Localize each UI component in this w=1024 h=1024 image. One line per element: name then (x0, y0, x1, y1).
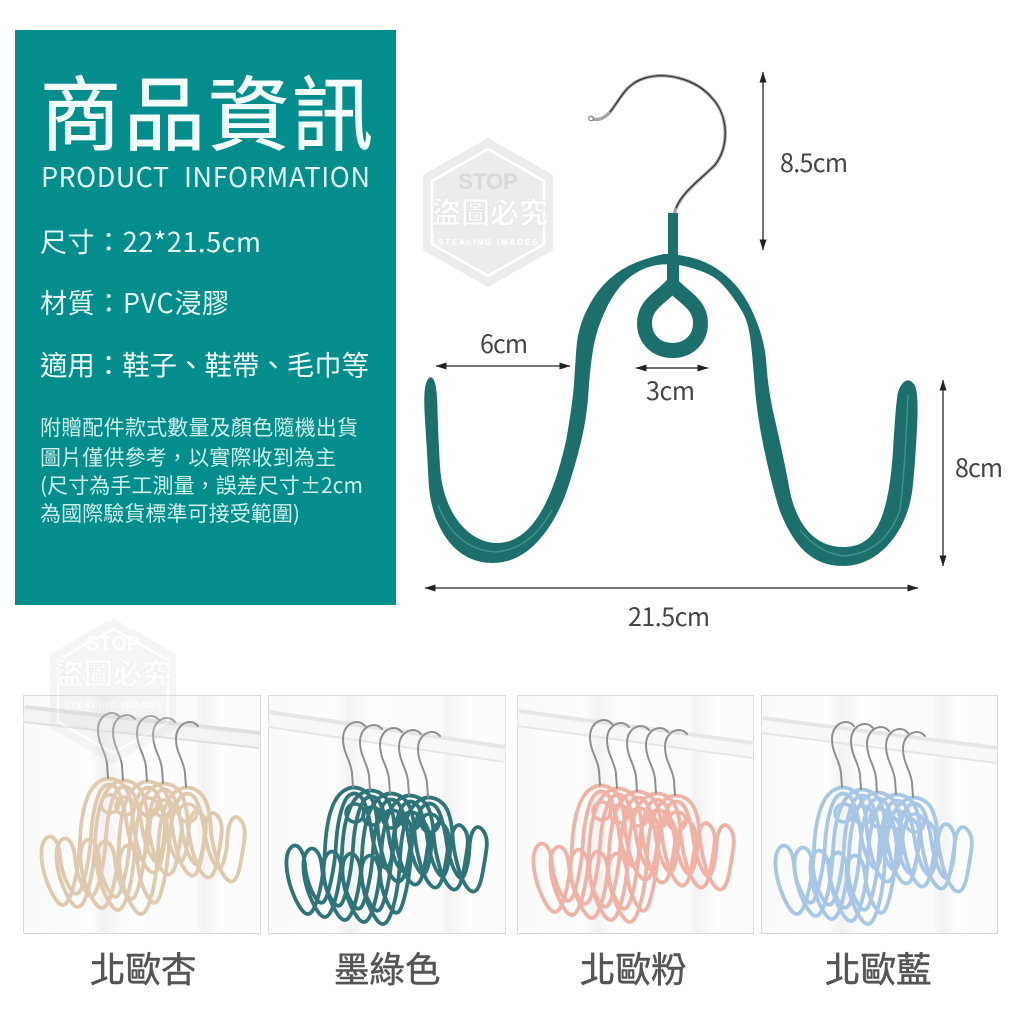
spec: size: 尺寸：22*21.5cm (40, 221, 261, 260)
dimension: 6cm (436, 325, 570, 366)
watermark: bottom left: STOP (86, 633, 140, 655)
watermark: centre: 盜圖必究 (432, 190, 548, 232)
watermark: bottom left: 盜圖必究 (55, 651, 171, 693)
subtitle: PRODUCT (41, 156, 169, 195)
disclaimer note: 為國際驗貨標準可接受範圍) (40, 498, 300, 528)
watermark: centre: STEALING IMAGES (438, 237, 538, 247)
metal hook (592, 76, 725, 215)
disclaimer note (40, 412, 363, 528)
disclaimer note: 圖片僅供參考，以實際收到為主 (40, 442, 336, 472)
watermark: centre: STOP (458, 169, 518, 194)
colour tile: dark green (268, 696, 506, 934)
title: 商品資訊 (40, 51, 373, 168)
dimension: 6cm: 6cm (480, 325, 528, 361)
watermark: centre (423, 138, 553, 287)
wire highlights (438, 395, 908, 556)
label: blue: 北歐藍 (825, 942, 932, 993)
watermark: bottom left (50, 618, 176, 764)
subtitle (41, 156, 370, 195)
dimension: 21.5cm: 21.5cm (628, 598, 710, 634)
dimension: 8.5cm: 8.5cm (780, 144, 848, 180)
label: apricot: 北歐杏 (90, 942, 197, 993)
label: dark green: 墨綠色 (334, 942, 441, 993)
disclaimer note: (尺寸為手工測量，誤差尺寸±2cm (40, 470, 363, 500)
panel: product information (15, 30, 396, 605)
colour tile: apricot (24, 696, 260, 934)
dimension: 3cm (636, 368, 708, 408)
spec: usage: 適用：鞋子、鞋帶、毛巾等 (40, 343, 369, 383)
dimension: 8cm: 8cm (955, 449, 1003, 485)
spec: material: 材質：PVC浸膠 (40, 282, 229, 321)
label: pink: 北歐粉 (580, 942, 687, 993)
colour tile: pink (518, 696, 754, 934)
disclaimer note: 附贈配件款式數量及顏色隨機出貨 (40, 412, 358, 442)
colour tile: blue (762, 696, 998, 934)
green hanger body (424, 254, 918, 566)
stem and ring (644, 213, 700, 350)
subtitle: INFORMATION (184, 156, 370, 195)
dimension: 3cm: 3cm (646, 372, 695, 408)
main hanger illustration (424, 76, 918, 566)
watermark: bottom left: STEALING IMAGES (64, 700, 162, 710)
